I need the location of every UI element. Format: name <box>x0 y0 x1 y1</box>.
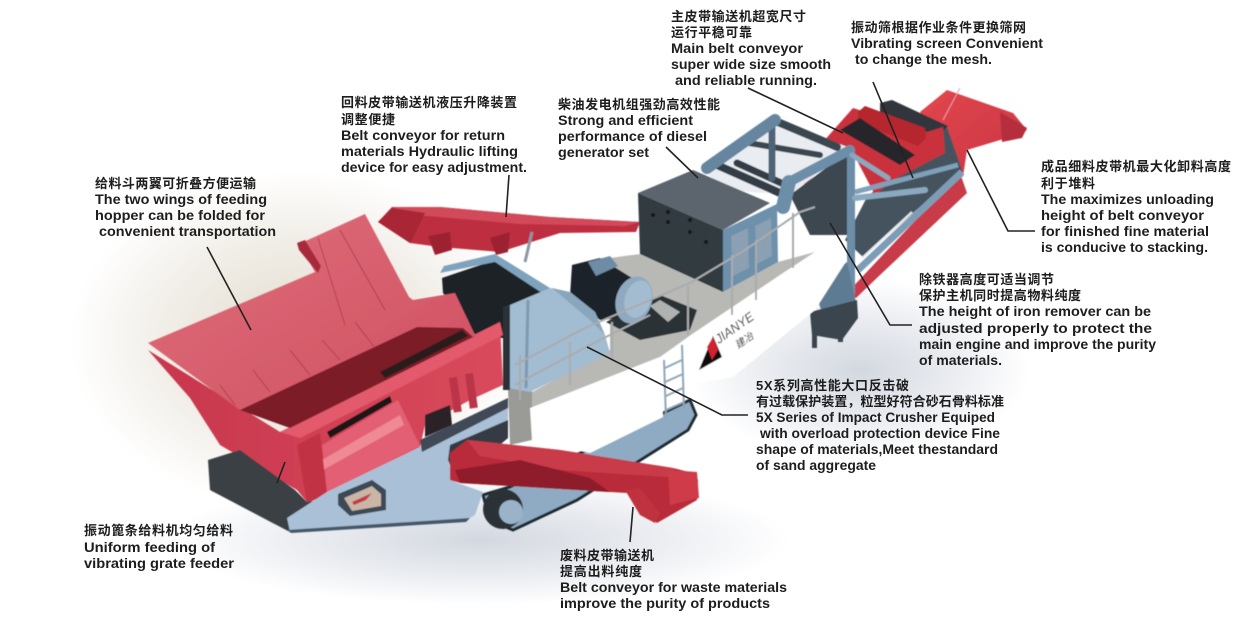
label: grate feeder: vibrating grate feeder <box>84 555 235 571</box>
impact crusher body <box>503 288 610 392</box>
label: fine material conveyor: for finished fine material <box>1041 223 1209 239</box>
leader: return conveyor <box>506 175 509 217</box>
logo wordmark: JIANYE <box>711 309 757 347</box>
label: impact crusher: 5X Series of Impact Crusher Equiped <box>756 409 995 425</box>
label: fine material conveyor: is conducive to stacking. <box>1041 239 1208 255</box>
hopper fold tab <box>297 240 321 273</box>
hopper wing <box>148 214 476 410</box>
label: feeding hopper <box>95 176 276 239</box>
leader: generator <box>666 147 698 178</box>
label: fine material conveyor: 成品细料皮带机最大化卸料高度 <box>1041 159 1231 174</box>
label: iron remover: 保护主机同时提高物料纯度 <box>919 288 1081 303</box>
screen underframe <box>813 262 857 315</box>
label: impact crusher: with overload protection device Fine <box>759 425 1000 441</box>
label: feeding hopper: hopper can be folded for <box>95 207 266 223</box>
logo: red diamond on black triangle <box>699 336 722 370</box>
label: diesel generator: Strong and efficient <box>558 112 693 128</box>
label: waste conveyor: 废料皮带输送机 <box>560 548 654 563</box>
label: iron remover <box>919 272 1156 368</box>
vibrating screen <box>823 100 962 270</box>
leader: waste conveyor <box>630 507 633 542</box>
left hopper body <box>148 322 503 503</box>
label: main belt conveyor: Main belt conveyor <box>671 40 804 56</box>
label: main belt conveyor: super wide size smooth <box>671 56 831 72</box>
label: impact crusher: of sand aggregate <box>756 457 876 473</box>
label: impact crusher: 有过载保护装置，粒型好符合砂石骨料标准 <box>756 394 1004 409</box>
hopper bolts and seams <box>220 230 385 405</box>
leader: iron remover <box>830 223 912 325</box>
leader: fine material conveyor <box>967 150 1035 231</box>
label: return conveyor: 回料皮带输送机液压升降装置 <box>341 95 517 110</box>
label: grate feeder <box>84 523 235 571</box>
rear legs <box>810 300 858 348</box>
leader: impact crusher <box>587 347 748 415</box>
label: vibrating screen: to change the mesh. <box>855 51 992 67</box>
guard railing <box>515 207 815 400</box>
label: main belt conveyor: 运行平稳可靠 <box>671 25 752 40</box>
motor <box>570 256 697 340</box>
label: feeding hopper: 给料斗两翼可折叠方便运输 <box>95 176 256 191</box>
label: vibrating screen: Vibrating screen Convenient <box>851 35 1043 51</box>
label: diesel generator: performance of diesel <box>558 128 707 144</box>
ground shadow behind machine <box>70 170 1030 605</box>
waste belt conveyor <box>450 440 699 523</box>
access ladder <box>664 345 684 420</box>
lower white panel <box>530 357 663 453</box>
label: fine material conveyor: The maximizes unloading <box>1041 191 1214 207</box>
label: grate feeder: Uniform feeding of <box>84 539 215 555</box>
label: return conveyor: device for easy adjustment. <box>341 159 527 175</box>
label: main belt conveyor: and reliable running. <box>675 72 817 88</box>
label: fine material conveyor <box>1041 159 1231 255</box>
crawler track <box>483 400 696 530</box>
label: impact crusher <box>756 378 1004 473</box>
label: impact crusher: shape of materials,Meet thestandard <box>756 441 998 457</box>
leader: main belt <box>748 88 843 133</box>
label: iron remover: of materials. <box>919 352 1002 368</box>
label: return conveyor: 调整便捷 <box>341 112 395 127</box>
label: return conveyor <box>341 95 527 175</box>
label: feeding hopper: The two wings of feeding <box>95 191 267 207</box>
return belt conveyor <box>378 207 640 262</box>
leader: hopper wings <box>207 247 251 330</box>
label: waste conveyor: 提高出料纯度 <box>560 564 642 579</box>
hopper inner trough <box>240 327 473 428</box>
label: iron remover: 除铁器高度可适当调节 <box>919 272 1054 287</box>
blue chassis <box>287 398 508 533</box>
label: fine material conveyor: 利于堆料 <box>1041 176 1095 191</box>
label: fine material conveyor: height of belt conveyor <box>1041 207 1205 223</box>
label: iron remover: main engine and improve the purity <box>919 336 1156 352</box>
label: grate feeder: 振动篦条给料机均匀给料 <box>84 523 233 538</box>
label: impact crusher: 5X系列高性能大口反击破 <box>756 378 909 393</box>
diesel generator set <box>638 170 778 292</box>
label: vibrating screen <box>851 20 1043 67</box>
label: diesel generator: 柴油发电机组强劲高效性能 <box>558 97 720 112</box>
label: diesel generator <box>558 97 720 160</box>
label: main belt conveyor <box>671 9 831 88</box>
gray pillar below crusher <box>508 385 532 445</box>
label: waste conveyor: Belt conveyor for waste materials <box>560 579 787 595</box>
discharge conveyor fan <box>790 88 1027 298</box>
leader: grate feeder <box>277 462 285 483</box>
vibrating grate base plate <box>208 450 320 531</box>
upper white panel with logo <box>688 240 847 384</box>
machine illustration <box>148 88 1027 533</box>
label: iron remover: The height of iron remover can be <box>919 303 1151 319</box>
label: diesel generator: generator set <box>558 144 649 160</box>
label: return conveyor: Belt conveyor for return <box>341 127 505 143</box>
rear frame <box>702 118 925 293</box>
label: main belt conveyor: 主皮带输送机超宽尺寸 <box>671 9 806 24</box>
label: waste conveyor <box>560 548 787 611</box>
label: return conveyor: materials Hydraulic lifting <box>341 143 518 159</box>
logo Chinese name: 建冶 <box>733 330 757 351</box>
deck <box>508 252 815 410</box>
label: feeding hopper: convenient transportation <box>99 223 276 239</box>
label: vibrating screen: 振动筛根据作业条件更换筛网 <box>851 20 1026 35</box>
leader: vibrating screen <box>873 82 913 178</box>
feed box <box>440 254 550 338</box>
leader lines <box>207 82 1035 542</box>
label: iron remover: adjusted properly to protect the <box>919 320 1152 336</box>
label: waste conveyor: improve the purity of products <box>560 595 770 611</box>
